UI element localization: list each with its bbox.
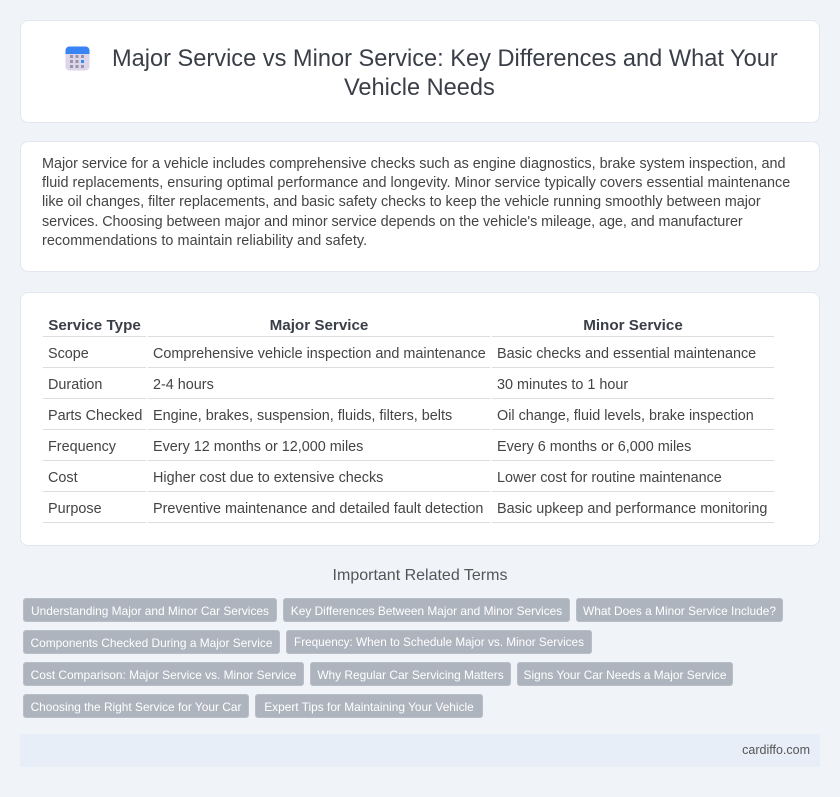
text block: introduction (42, 156, 790, 249)
related terms tags: Cost Comparison: Major Service vs. Minor Service (31, 668, 296, 682)
related terms tags: Key Differences Between Major and Minor Services (291, 604, 562, 618)
text block: introduction: like oil changes, filter replacements, and basic safety checks to keep the vehicle running smoothly between major (42, 194, 761, 210)
text block: introduction: fluid replacements, ensuring optimal performance and longevity. Minor service typically covers essential maintenance (42, 175, 790, 191)
comparison table: Major Service (270, 317, 368, 334)
comparison table: Higher cost due to extensive checks (153, 470, 383, 486)
related terms tags: Signs Your Car Needs a Major Service (524, 668, 726, 682)
comparison table: Duration (48, 377, 102, 393)
related terms tags (23, 598, 783, 718)
comparison table: Oil change, fluid levels, brake inspection (497, 408, 754, 424)
related terms tags: Components Checked During a Major Service (31, 636, 272, 650)
panel: introduction (20, 141, 820, 272)
comparison table (43, 317, 774, 523)
comparison table: Every 12 months or 12,000 miles (153, 439, 363, 455)
related terms tags: Why Regular Car Servicing Matters (317, 668, 504, 682)
comparison table: Basic checks and essential maintenance (497, 346, 756, 362)
comparison table: 30 minutes to 1 hour (497, 377, 628, 393)
related terms tags: Choosing the Right Service for Your Car (31, 700, 241, 714)
comparison table: Engine, brakes, suspension, fluids, filters, belts (153, 408, 452, 424)
title: Major Service vs Minor Service: Key Differences and What Your (112, 46, 778, 72)
comparison table: Parts Checked (48, 408, 142, 424)
comparison table: Scope (48, 346, 89, 362)
text block: introduction: Major service for a vehicle includes comprehensive checks such as engine diagnostics, brake system inspection, and (42, 156, 785, 172)
comparison table: Lower cost for routine maintenance (497, 470, 722, 486)
comparison table: Service Type (48, 317, 141, 334)
comparison table: Minor Service (583, 317, 683, 334)
comparison table: Every 6 months or 6,000 miles (497, 439, 691, 455)
related terms tags: Expert Tips for Maintaining Your Vehicle (264, 700, 474, 714)
title (112, 46, 778, 101)
comparison table: Preventive maintenance and detailed fault detection (153, 501, 483, 517)
panel: comparison table (20, 292, 820, 546)
comparison table: Comprehensive vehicle inspection and maintenance (153, 346, 486, 362)
title: Vehicle Needs (344, 75, 495, 101)
comparison table: Frequency (48, 439, 116, 455)
comparison table: Cost (48, 470, 78, 486)
related terms tags: Understanding Major and Minor Car Services (31, 604, 269, 618)
comparison table: Purpose (48, 501, 102, 517)
text block: introduction: recommendations to maintain reliability and safety. (42, 233, 367, 249)
related terms tags: What Does a Minor Service Include? (583, 604, 776, 618)
panel: header (20, 20, 820, 123)
comparison table: 2-4 hours (153, 377, 214, 393)
related terms tags: Frequency: When to Schedule Major vs. Minor Services (294, 636, 584, 649)
heading: important related terms: Important Related Terms (333, 567, 507, 584)
comparison table: Basic upkeep and performance monitoring (497, 501, 767, 517)
icon: calendar (66, 46, 90, 70)
footer (20, 734, 820, 767)
footer source text: cardiffo.com (742, 743, 810, 757)
text block: introduction: services. Choosing between major and minor service depends on the vehicle's mileage, age, and manufacturer (42, 214, 743, 230)
